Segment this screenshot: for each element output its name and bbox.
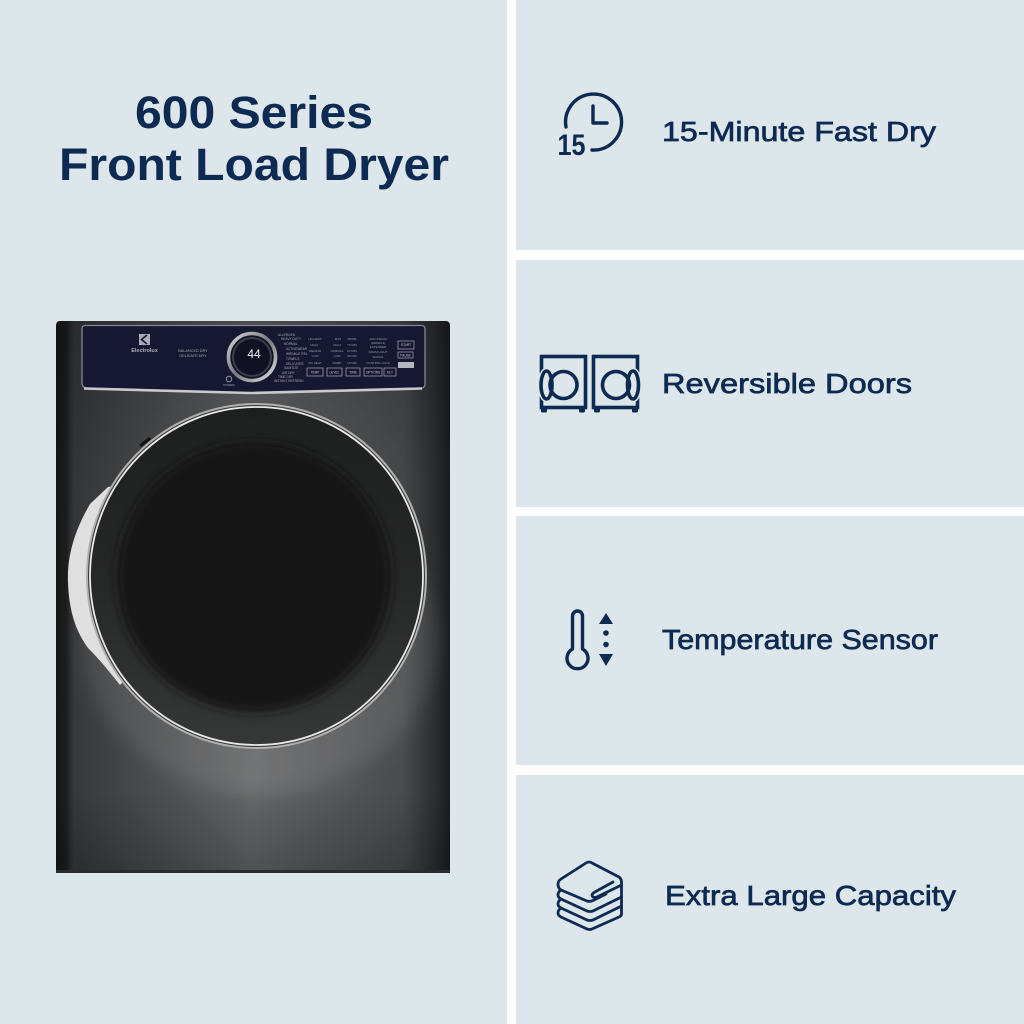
settings options: DAMP (333, 361, 341, 365)
feature: reversible doors (541, 356, 912, 412)
cycle list: ALLERGEN (278, 333, 296, 337)
settings options: HIGH (310, 343, 318, 347)
button labels: LEVEL (330, 370, 340, 374)
button labels (311, 343, 411, 374)
cycle list: ACTIVEWEAR (286, 347, 308, 351)
icon: 15 minute clock (558, 94, 622, 162)
settings options: EXTENDED (370, 345, 387, 349)
settings options: CONTROL LOCK (366, 361, 390, 365)
feature: temperature sensor (567, 611, 938, 669)
door handle (68, 480, 200, 685)
panel: product background (0, 0, 507, 1024)
title: 600 Series (135, 87, 373, 138)
cycle list: AIR DRY (282, 371, 296, 375)
brand logo: Electrolux (131, 348, 159, 354)
feature: extra large capacity (558, 862, 956, 930)
settings options: NORMAL (331, 349, 344, 353)
panel label: BALANCED DRY (178, 349, 208, 353)
cycle list: INSTANT REFRESH (274, 379, 304, 383)
setting buttons (307, 341, 414, 376)
title (59, 87, 449, 190)
button labels: DLY (387, 370, 394, 374)
power button (223, 376, 235, 387)
settings options (308, 337, 390, 365)
feature: fast dry (558, 94, 936, 162)
feature label: Reversible Doors (662, 368, 912, 399)
settings options: DRUM LIGHT (369, 350, 387, 354)
icon: 15 minute clock: 15 (558, 129, 586, 162)
settings options: MAX (335, 337, 341, 341)
settings options: HIGHEST (308, 337, 322, 341)
door bezel (90, 407, 423, 745)
selector dial: 44 (247, 347, 261, 361)
cycle list: HEAVY DUTY (281, 337, 302, 341)
button labels: PAUSE (400, 354, 411, 358)
panel: fast dry (516, 0, 1024, 250)
cabinet foot (56, 870, 450, 873)
settings options: LOW (312, 354, 319, 358)
brand logo (131, 334, 159, 354)
door outer ring (87, 404, 426, 748)
settings options: MEDIUM (309, 349, 322, 353)
power button: POWER (223, 383, 235, 387)
settings options: LOW (334, 354, 341, 358)
settings options: 15 MIN (347, 361, 357, 365)
panel: extra large capacity (516, 775, 1024, 1024)
wifi button (398, 362, 414, 368)
panel: temperature sensor (516, 516, 1024, 765)
cycle list: TIME DRY (278, 375, 294, 379)
button labels: OPTIONS (366, 370, 380, 374)
cycle list: DELICATES (286, 362, 303, 366)
feature label: Extra Large Capacity (665, 880, 956, 911)
lower sheen under door (82, 487, 438, 793)
panel label: DELICATE DRY (179, 354, 207, 358)
title: Front Load Dryer (59, 139, 449, 190)
settings options: ADD STEAM (369, 337, 387, 341)
dryer illustration (56, 321, 450, 873)
button labels: START (401, 343, 411, 347)
cycle list (274, 333, 308, 383)
settings options: NO HEAT (308, 361, 322, 365)
feature label: Temperature Sensor (662, 624, 938, 655)
icon: stacked laundry (558, 862, 622, 930)
icon: two dryers (541, 356, 638, 412)
feature label: 15-Minute Fast Dry (662, 116, 936, 147)
panel label (178, 349, 208, 358)
cycle list: WRINKLE REL (286, 352, 308, 356)
button labels: TIME (349, 370, 357, 374)
settings options: 75 MIN (347, 343, 357, 347)
cycle list: NORMAL (284, 342, 298, 346)
settings options: HIGH (333, 343, 341, 347)
dryer cabinet (56, 321, 450, 872)
settings options: 60 MIN (347, 349, 357, 353)
cycle list: SANITIZE (284, 366, 298, 370)
panel: reversible doors (516, 260, 1024, 507)
panel bottom trim (84, 388, 422, 393)
selector dial (228, 334, 276, 380)
settings options: SIGNAL (372, 355, 384, 359)
door top hinge (140, 438, 150, 446)
icon: thermometer with arrows (567, 611, 613, 669)
settings options: MORE (348, 337, 356, 341)
settings options: WRINKLE (371, 341, 385, 345)
control panel (82, 326, 425, 393)
button labels: TEMP (311, 370, 319, 374)
cabinet shading (56, 321, 450, 872)
settings options: 45 MIN (347, 354, 357, 358)
door glass (117, 442, 391, 712)
cycle list: TOWELS (286, 357, 299, 361)
